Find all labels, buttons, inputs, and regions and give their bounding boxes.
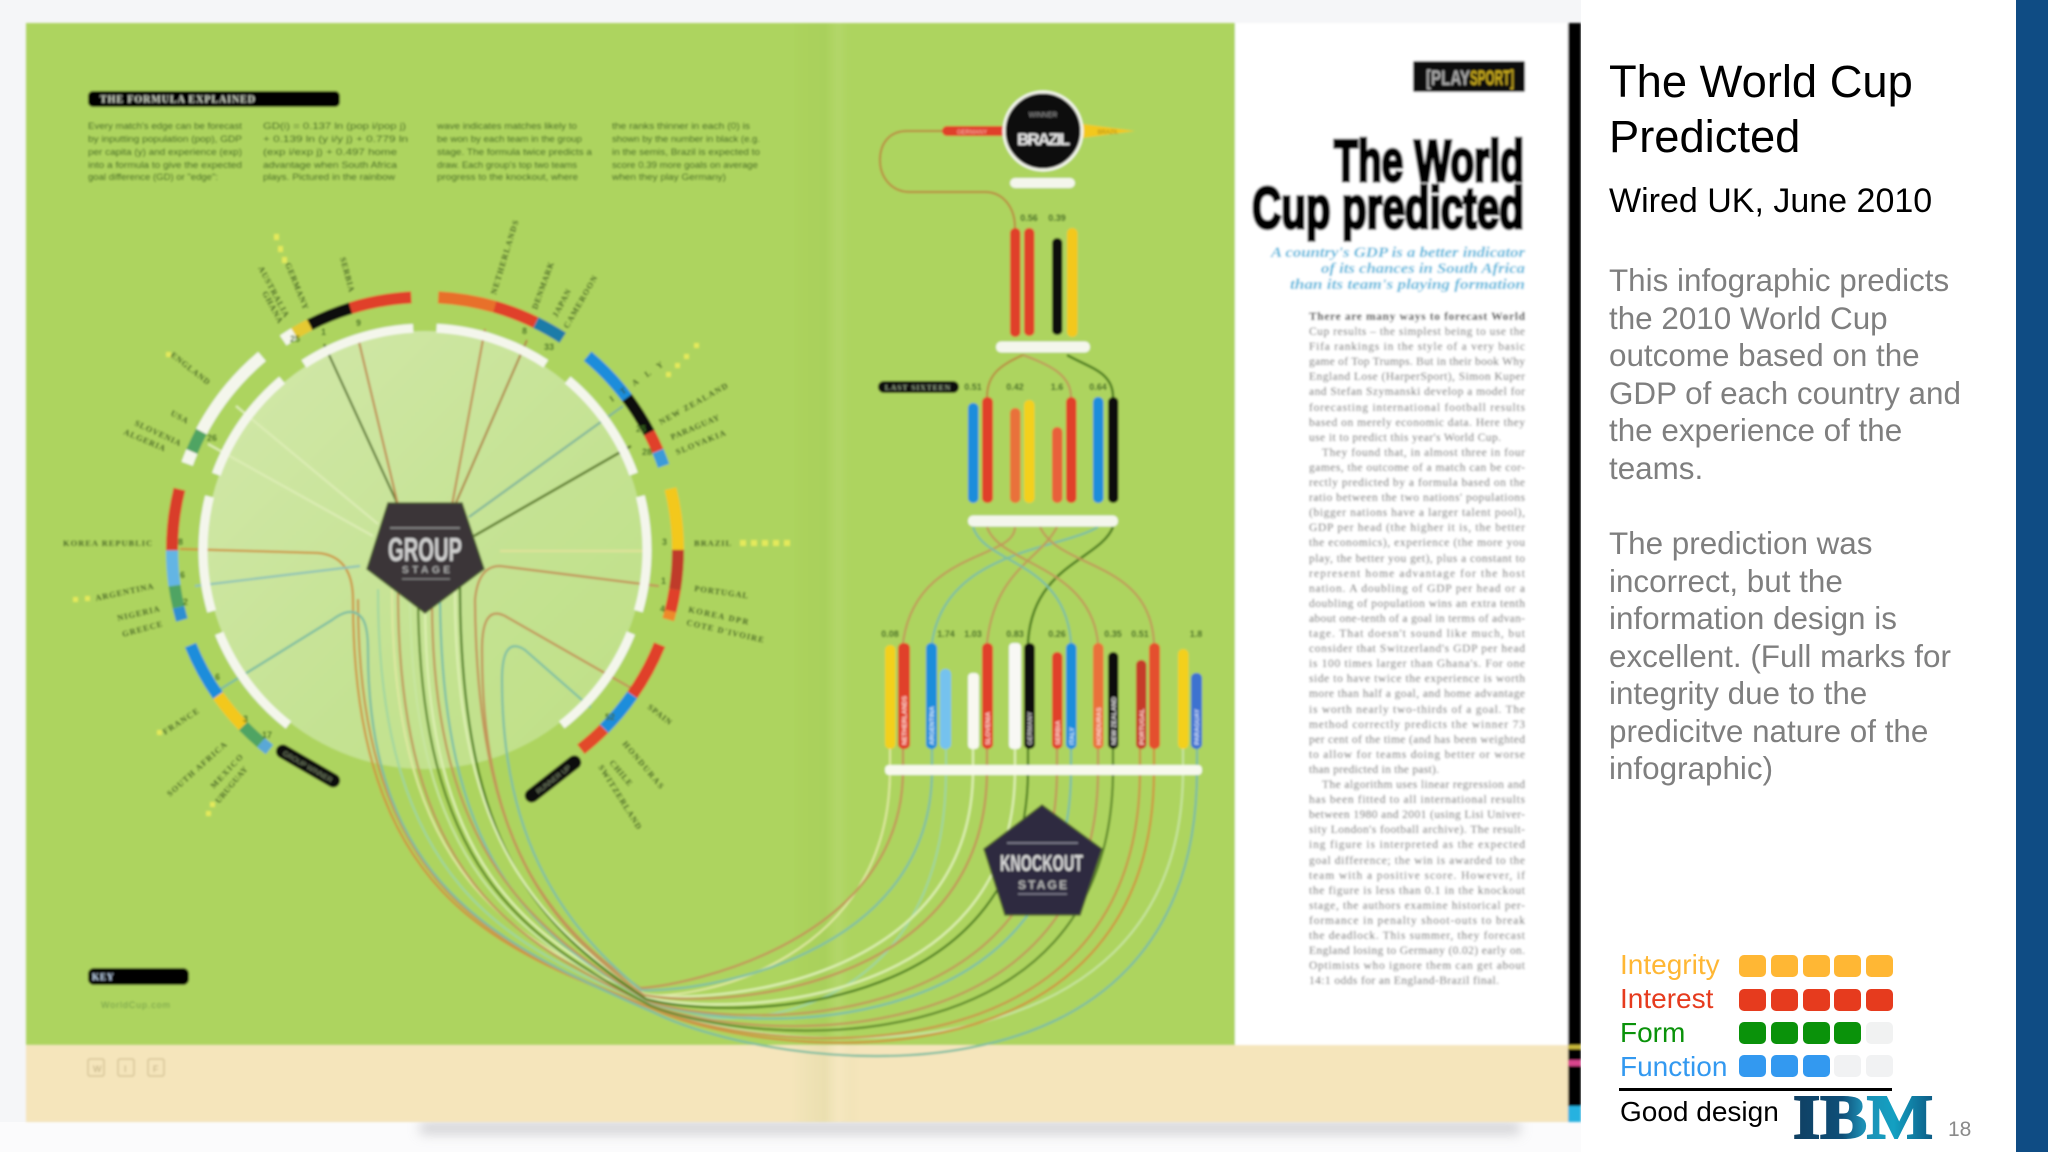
play sport tag: [PLAY <box>1426 67 1470 90</box>
black label pills on ring: GROUP WINNER <box>281 750 333 784</box>
article body text: more than half a goal, and home advantage <box>1309 688 1525 700</box>
formula explanation text columns: per capita (y) and experience (exp) <box>88 147 242 158</box>
quarter-final bars: 0.51 <box>964 382 982 392</box>
round of sixteen bars: ARGENTINA <box>929 706 936 745</box>
article body text: formance in penalty shoot-outs to break <box>1309 915 1525 927</box>
country labels around the ring: SWITZERLAND <box>596 763 645 832</box>
black label pills on ring <box>273 742 584 805</box>
article body text: tage. That doesn't sound like much, but <box>1309 628 1526 640</box>
group probability values: 6 <box>180 570 185 580</box>
article body text: (bigger nations have a larger talent pool), <box>1309 507 1525 519</box>
commentary paragraph two: information design is <box>1609 601 1897 636</box>
country labels around the ring: PORTUGAL <box>694 583 750 601</box>
article body text: England Lose (HarperSport), Simon Kuper <box>1309 371 1525 383</box>
article body text: represent home advantage for the host <box>1309 568 1526 580</box>
article body text: consider that Switzerland's GDP per head <box>1309 643 1525 655</box>
article headline <box>1252 129 1524 241</box>
article body text: stage, the authors examine historical per- <box>1309 900 1525 912</box>
white inner ring segments <box>203 328 647 772</box>
article body text: play, the better you get), plus a constant to <box>1309 553 1525 565</box>
group probability values: 8 <box>522 326 527 336</box>
country labels around the ring: NETHERLANDS <box>488 218 521 296</box>
slide title: The World Cup <box>1609 56 1913 107</box>
group probability values: 4 <box>660 604 665 614</box>
formula explanation text columns: shown by the number in black (e.g. <box>612 134 760 145</box>
formula explanation text columns: Every match's edge can be forecast <box>88 121 242 132</box>
semi-final bars <box>996 213 1090 352</box>
article body text: nation. A doubling of GDP per head or a <box>1309 583 1525 595</box>
article body text: There are many ways to forecast World <box>1309 311 1526 323</box>
country labels around the ring: GERMANY <box>283 261 311 312</box>
world cup stars by country <box>73 234 790 816</box>
article body text: between 1980 and 2001 (using Lisi Univer- <box>1309 809 1525 821</box>
formula explanation text columns: + 0.139 ln (y i/y j) + 0.779 ln <box>263 134 408 145</box>
formula explanation text columns: progress to the knockout, where <box>437 172 578 183</box>
footer page icons: W <box>93 1064 102 1074</box>
formula explanation text columns: when they play Germany) <box>611 172 726 183</box>
quarter-final bars: 1.6 <box>1051 382 1063 392</box>
commentary paragraph one: the experience of the <box>1609 413 1902 448</box>
round of sixteen bars: 0.51 <box>1131 629 1149 639</box>
knockout stage pentagon badge: KNOCKOUT <box>1000 850 1083 876</box>
rating squares: function <box>1739 1055 1893 1077</box>
formula explanation text columns: (exp i/exp j) + 0.497 home <box>263 147 397 158</box>
article body text: ratio between the two nations' populations <box>1309 492 1526 504</box>
formula explanation text columns: stage. The formula twice predicts a <box>437 147 593 158</box>
country labels around the ring: CAMEROON <box>561 273 600 330</box>
navy edge stripe <box>2016 0 2048 1152</box>
country labels around the ring: SPAIN <box>646 702 675 727</box>
rating label: integrity: Integrity <box>1620 949 1720 980</box>
article body text: to allow for teams doing better or worse <box>1309 749 1525 761</box>
round of sixteen bars: HONDURAS <box>1096 707 1103 745</box>
black label pills on ring: RUNNER UP <box>535 764 573 796</box>
good design label: Good design <box>1620 1096 1779 1127</box>
commentary paragraph two: incorrect, but the <box>1609 564 1843 598</box>
article body text: side to have twice the experience is worth <box>1309 673 1525 685</box>
country labels around the ring: ENGLAND <box>169 350 213 387</box>
article body text: Cup results – the simplest being to use the <box>1309 326 1525 338</box>
play sport tag: SPORT] <box>1470 67 1514 90</box>
country labels around the ring: COTE D'IVOIRE <box>686 617 766 645</box>
round of sixteen bars: 1.74 <box>937 629 955 639</box>
final: Brazil winner badge: BRAZIL <box>1097 130 1119 136</box>
group probability values: 25 <box>290 334 300 344</box>
rating squares: form <box>1739 1022 1893 1044</box>
final: Brazil winner badge: GERMANY <box>957 130 987 136</box>
country labels around the ring: NIGERIA <box>116 603 161 623</box>
round of sixteen bars: 0.83 <box>1006 629 1024 639</box>
country labels around the ring: BRAZIL <box>694 538 732 548</box>
group stage light disc <box>206 331 644 769</box>
group probability values: 8 <box>178 537 183 547</box>
commentary paragraph two: integrity due to the <box>1609 676 1867 711</box>
formula explanation text columns: be won by each team in the group <box>437 134 582 145</box>
outer coloured ring: group team segments <box>172 297 678 803</box>
page: beige footer band <box>26 1045 1568 1122</box>
formula explanation text columns: goal difference (GD) or "edge": <box>88 172 218 183</box>
centre fold shading <box>790 23 860 1122</box>
article body text: about one-tenth of a goal in terms of advan- <box>1309 613 1525 625</box>
article body text: goal difference; the win is awarded to the <box>1309 855 1525 867</box>
right commentary panel background <box>1581 0 2016 1152</box>
commentary paragraph two: The prediction was <box>1609 526 1872 561</box>
article body text: Optimists who ignore them can get about <box>1309 960 1526 972</box>
formula explanation text columns: wave indicates matches likely to <box>436 121 577 132</box>
round of sixteen bars: 0.26 <box>1048 629 1066 639</box>
commentary paragraph two: predicitve nature of the <box>1609 714 1928 748</box>
round of sixteen bars <box>881 629 1202 775</box>
article body text: the deadlock. This summer, they forecast <box>1309 930 1526 942</box>
heading pill: the formula explained: THE FORMULA EXPLAINED <box>100 94 255 106</box>
group stage pentagon badge: GROUP <box>388 531 462 568</box>
country labels around the ring: CHILE <box>607 758 635 788</box>
article body text: is 100 times larger than Ghana's. For one <box>1309 658 1525 670</box>
round of sixteen bars: NEW ZEALAND <box>1111 697 1118 745</box>
article body text: sity London's football archive). The result- <box>1309 824 1525 836</box>
group probability values <box>178 318 667 740</box>
footer page icons: F <box>153 1064 159 1074</box>
country labels around the ring: SLOVAKIA <box>674 427 728 457</box>
article standfirst: of its chances in South Africa <box>1321 261 1526 277</box>
curved team routes: group stage to round of 16 <box>181 549 1197 1056</box>
formula explanation text columns: GD(i) = 0.137 ln (pop i/pop j) <box>263 121 406 132</box>
slide title: Predicted <box>1609 111 1800 162</box>
country labels around the ring: GREECE <box>121 618 164 639</box>
round of sixteen bars: SLOVENIA <box>985 711 992 745</box>
knockout stage pentagon badge <box>984 805 1102 915</box>
key pill and caption: KEY <box>92 972 115 982</box>
round of sixteen bars: 1.8 <box>1190 629 1202 639</box>
article body text: Fifa rankings in the style of a very basic <box>1309 341 1525 353</box>
group stage pentagon badge <box>367 503 484 613</box>
final: Brazil winner badge: BRAZIL <box>1017 130 1070 149</box>
rating label: form: Form <box>1620 1017 1685 1048</box>
article body text: per cent of the time (and has been weighted <box>1309 734 1525 746</box>
last sixteen pill: LAST SIXTEEN <box>885 383 951 392</box>
article standfirst: than its team's playing formation <box>1290 277 1525 293</box>
formula explanation text columns: plays. Pictured in the rainbow <box>263 172 395 183</box>
key pill and caption: WorldCup.com <box>101 1000 170 1010</box>
commentary paragraph one: This infographic predicts <box>1609 263 1949 298</box>
slide source: Wired UK, June 2010 <box>1609 182 1932 220</box>
country labels around the ring: GHANA <box>260 289 286 325</box>
country labels around the ring: USA <box>169 408 191 426</box>
formula explanation text columns: advantage when South Africa <box>263 160 398 171</box>
rating label: function: Function <box>1620 1051 1727 1082</box>
formula explanation text columns: the ranks thinner in each (0) is <box>612 121 750 132</box>
commentary paragraph two: excellent. (Full marks for <box>1609 638 1951 674</box>
article body text: use it to predict this year's World Cup. <box>1309 432 1501 444</box>
commentary paragraph one: GDP of each country and <box>1609 376 1961 410</box>
group probability values: 25 <box>636 424 646 434</box>
formula explanation text columns <box>88 121 760 183</box>
group probability values: 3 <box>662 537 667 547</box>
country labels around the ring: MEXICO <box>208 751 245 790</box>
round of sixteen bars: SERBIA <box>1055 720 1062 745</box>
article body text: method correctly predicts the winner 73 <box>1309 719 1525 731</box>
page: green spread background <box>26 23 1235 1045</box>
commentary paragraph one: outcome based on the <box>1609 338 1920 373</box>
group probability values: 17 <box>262 730 272 740</box>
formula explanation text columns: draw. Each group's top two teams <box>437 160 577 171</box>
slide number: 18 <box>1948 1118 1971 1141</box>
formula explanation text columns: by inputting population (pop), GDP <box>88 134 242 145</box>
article body text: the figure is less than 0.1 in the knockout <box>1309 885 1526 897</box>
country labels around the ring: ARGENTINA <box>94 581 155 603</box>
country labels around the ring <box>63 218 766 832</box>
article body text: team with a positive score. However, if <box>1309 870 1525 882</box>
article standfirst: A country's GDP is a better indicator <box>1270 245 1525 261</box>
formula explanation text columns: into a formula to give the expected <box>88 160 242 171</box>
article body text: is worth nearly two-thirds of a goal. The <box>1309 704 1525 716</box>
article body text: and Stefan Szymanski develop a model for <box>1309 386 1525 398</box>
heading pill: the formula explained <box>88 91 340 107</box>
country labels around the ring: ITALY <box>607 359 666 404</box>
article body text: The algorithm uses linear regression and <box>1322 779 1525 791</box>
group probability values: 1 <box>321 327 326 337</box>
country labels around the ring: PARAGUAY <box>669 412 722 442</box>
article body text: the economics), experience (the more you <box>1309 537 1525 549</box>
round of sixteen bars: 0.08 <box>881 629 899 639</box>
commentary paragraph one: teams. <box>1609 450 1703 486</box>
country labels around the ring: NEW ZEALAND <box>657 380 730 427</box>
commentary paragraph one: the 2010 World Cup <box>1609 300 1888 336</box>
group probability values: 33 <box>544 342 554 352</box>
country labels around the ring: ALGERIA <box>122 427 168 454</box>
group probability values: 28 <box>642 447 652 457</box>
country labels around the ring: FRANCE <box>161 705 201 737</box>
article body text: than predicted in the past). <box>1309 764 1439 776</box>
round of sixteen bars: 1.03 <box>964 629 982 639</box>
final: Brazil winner badge: WINNER <box>1029 112 1057 119</box>
round of sixteen bars: 0.35 <box>1104 629 1122 639</box>
round of sixteen bars: PORTUGAL <box>1139 708 1146 745</box>
article body text: rectly predicted by a formula based on the <box>1309 477 1525 489</box>
article standfirst <box>1270 245 1526 293</box>
semi-final bars: 0.39 <box>1048 213 1066 223</box>
group probability values: 6 <box>215 672 220 682</box>
country labels around the ring: URUGUAY <box>213 764 250 805</box>
group stage pentagon badge: STAGE <box>402 565 450 576</box>
round of sixteen bars: PARAGUAY <box>1194 708 1201 745</box>
group probability values: 26 <box>207 433 217 443</box>
footer page icons <box>88 1059 164 1076</box>
article body text: doubling of population wins an extra tenth <box>1309 598 1525 610</box>
country labels around the ring: HONDURAS <box>620 739 667 791</box>
key pill and caption <box>88 968 189 1010</box>
commentary paragraph one <box>1609 263 1961 486</box>
group probability values: 2 <box>183 597 188 607</box>
magazine spread photo <box>0 0 1581 1142</box>
quarter-final bars <box>964 382 1118 526</box>
article body text: forecasting international football results <box>1309 402 1526 414</box>
formula explanation text columns: in the semis, Brazil is expected to <box>612 147 760 158</box>
upper bracket connector curves <box>880 131 1154 643</box>
article body text: England losing to Germany (0.02) early on. <box>1309 945 1525 957</box>
round of sixteen bars: GERMANY <box>1027 711 1034 745</box>
article body text: 14:1 odds for an England-Brazil final. <box>1309 975 1499 987</box>
knockout stage pentagon badge: STAGE <box>1018 878 1067 892</box>
article body text: has been fitted to all international results <box>1309 794 1526 806</box>
legend divider <box>1619 1088 1892 1090</box>
group probability values: 52 <box>605 712 615 722</box>
round of sixteen bars: ITALY <box>1069 727 1076 745</box>
country labels around the ring: JAPAN <box>550 287 573 319</box>
article body text: games, the outcome of a match can be cor- <box>1309 462 1525 474</box>
country labels around the ring: AUSTRALIA <box>256 264 292 320</box>
commentary paragraph two <box>1609 526 1951 786</box>
quarter-final bars: 0.42 <box>1006 382 1024 392</box>
article body text: They found that, in almost three in four <box>1322 447 1525 459</box>
footer page icons: I <box>124 1064 127 1074</box>
play sport tag <box>1413 61 1525 92</box>
last sixteen pill <box>878 381 959 393</box>
rating legend <box>1620 949 1893 1082</box>
group probability values: 3 <box>243 714 248 724</box>
country labels around the ring: SOUTH AFRICA <box>165 739 229 798</box>
article body text: GDP per head (the higher it is, the better <box>1309 522 1525 534</box>
route lines from ring to group pentagon <box>195 329 647 586</box>
rating label: interest: Interest <box>1620 983 1713 1014</box>
country labels around the ring: KOREA DPR <box>688 604 750 627</box>
country labels around the ring: DENMARK <box>529 260 556 311</box>
final: Brazil winner badge <box>942 92 1135 188</box>
rating squares: integrity <box>1739 955 1893 977</box>
article body text: ing figure is interpreted as the expected <box>1309 839 1525 851</box>
formula explanation text columns: score 0.39 more goals on average <box>612 160 758 171</box>
rating squares: interest <box>1739 989 1893 1011</box>
quarter-final bars: 0.64 <box>1089 382 1107 392</box>
commentary paragraph two: infographic) <box>1609 751 1773 786</box>
country labels around the ring: KOREA REPUBLIC <box>63 538 153 548</box>
country labels around the ring: SLOVENIA <box>133 418 183 448</box>
magazine spine edge <box>1568 23 1581 1122</box>
article body text <box>1309 311 1526 987</box>
page: white article page <box>1235 23 1568 1045</box>
group probability values: 9 <box>356 318 361 328</box>
article body text: based on merely economic data. Here they <box>1309 417 1525 429</box>
article body text: game of Top Trumps. But in their book Why <box>1309 356 1525 368</box>
slide title <box>1609 56 1913 162</box>
semi-final bars: 0.56 <box>1020 213 1038 223</box>
round of sixteen bars: NETHERLANDS <box>902 695 908 745</box>
group probability values: 1 <box>661 576 666 586</box>
country labels around the ring: SERBIA <box>338 256 357 294</box>
